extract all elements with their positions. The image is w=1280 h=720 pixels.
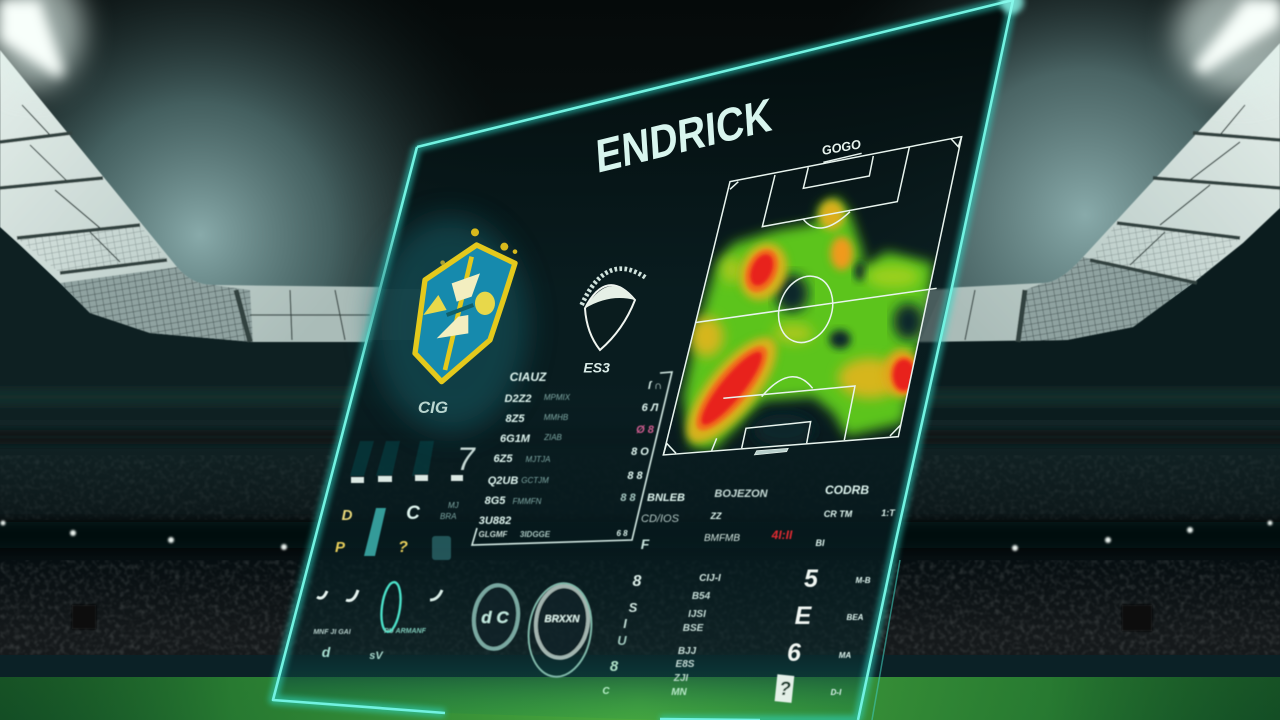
stats table: D2Z2	[505, 393, 531, 405]
lower gauges: PU ARMANF	[384, 628, 427, 635]
icon: team crest	[372, 217, 528, 433]
lower stat columns: ZJI	[673, 673, 688, 684]
stats table: CIAUZ	[510, 370, 547, 384]
floodlight right	[1175, 0, 1280, 95]
panel: holographic card	[273, 0, 1024, 720]
lower stat columns: MA	[839, 651, 851, 660]
lower stat columns: 1:T	[881, 508, 896, 518]
mini stat columns: C	[406, 503, 420, 524]
boxed digit	[775, 674, 794, 703]
mini stat columns: D	[342, 507, 353, 524]
lower gauges	[313, 579, 597, 681]
lower gauges: MNF JI GAI	[313, 629, 352, 636]
stats table: MJTJA	[526, 455, 550, 464]
stats table: Q2UB	[488, 475, 518, 487]
stats table: 8 8	[627, 470, 644, 482]
lower stat columns	[602, 483, 896, 703]
mini stat columns: ?	[398, 539, 408, 556]
gauge: medium ring: d C	[481, 608, 509, 627]
stats table	[472, 370, 672, 545]
lower stat columns: 8	[610, 658, 619, 675]
lower stat columns: CODRB	[825, 483, 869, 497]
lower stat columns: BI	[816, 538, 825, 548]
mini stat columns: MJ	[448, 501, 460, 510]
title: ENDRICK	[594, 88, 774, 183]
stats table: 3U882	[479, 515, 511, 527]
stats table: 8 8	[620, 492, 637, 504]
heatmap pitch	[663, 137, 962, 456]
lower stat columns: BOJEZON	[714, 488, 769, 500]
lower stat columns: U	[617, 633, 627, 648]
lower stat columns: B54	[692, 591, 711, 602]
stats table: MMHB	[544, 413, 569, 422]
stats table: 6G1M	[500, 433, 531, 445]
red live indicator: 4I:II	[771, 528, 793, 542]
lower stat columns: F	[641, 536, 650, 552]
mini stat columns: 7	[457, 441, 476, 477]
icon: stadium badge: ES3	[583, 359, 610, 375]
lower stat columns: 8	[633, 573, 642, 590]
panel frame glow	[273, 0, 1024, 720]
mini stat columns: P	[335, 539, 346, 556]
mini stat columns	[335, 441, 476, 560]
stats table: 6 Л	[642, 402, 659, 414]
lower stat columns: ZZ	[710, 511, 722, 521]
stats table: 3IDGGE	[520, 530, 551, 539]
stats table: ZIAB	[543, 433, 563, 442]
stats table: 6Z5	[494, 453, 513, 465]
lower stat columns: BJJ	[678, 646, 697, 657]
icon: stadium badge	[582, 269, 647, 375]
gauge: medium ring	[470, 582, 522, 652]
gauge: large ring	[523, 579, 597, 681]
crest caption: CIG	[418, 398, 448, 417]
stats table: MPMIX	[544, 393, 571, 402]
stats table: ſ ∩	[648, 380, 662, 392]
lower stat columns: CD/IOS	[641, 513, 680, 525]
lower stat columns: CR TM	[824, 509, 853, 519]
lower gauges: d	[322, 644, 331, 660]
gauge: small ring	[379, 581, 403, 633]
lower stat columns: 5	[804, 565, 819, 593]
stadium roof right	[920, 43, 1280, 342]
gauge: large ring: BRXXN	[544, 614, 580, 625]
stats table: Ø 8	[636, 424, 655, 436]
mini stat columns: BRA	[440, 512, 456, 521]
lower stat columns: BSE	[683, 623, 704, 634]
lower stat columns: IJSI	[688, 609, 706, 620]
lower stat columns: BEA	[847, 613, 864, 622]
lower gauges: sV	[369, 650, 384, 662]
lower stat columns: M-B	[855, 576, 871, 585]
heatmap blobs	[672, 197, 933, 456]
lower stat columns: E8S	[676, 659, 695, 670]
lower stat columns: BNLEB	[647, 492, 685, 504]
stats table: GCTJM	[521, 476, 549, 485]
lower stat columns: C	[602, 686, 610, 697]
lower stat columns: S	[629, 600, 638, 615]
stadium roof left	[0, 50, 383, 342]
stats table: 8 O	[631, 446, 649, 458]
stats table: 8Z5	[506, 413, 525, 425]
lower stat columns: E	[795, 602, 813, 630]
lower stat columns: CIJ-I	[699, 573, 721, 584]
pitch markings	[663, 137, 962, 455]
floodlight left	[0, 0, 84, 90]
stats table: 6 8	[616, 529, 628, 538]
lower stat columns: D-I	[831, 688, 842, 697]
lower stat columns: 6	[787, 639, 802, 667]
lower stat columns: I	[623, 616, 627, 631]
lower stat columns: BMFMB	[704, 533, 740, 544]
stats table: GLGMF	[479, 530, 509, 539]
stats table: 8G5	[485, 495, 506, 507]
stats table: FMMFN	[513, 497, 542, 506]
lower stat columns: MN	[671, 687, 688, 698]
boxed digit: ?	[779, 679, 791, 700]
pitch markings: GOGO	[821, 137, 862, 158]
